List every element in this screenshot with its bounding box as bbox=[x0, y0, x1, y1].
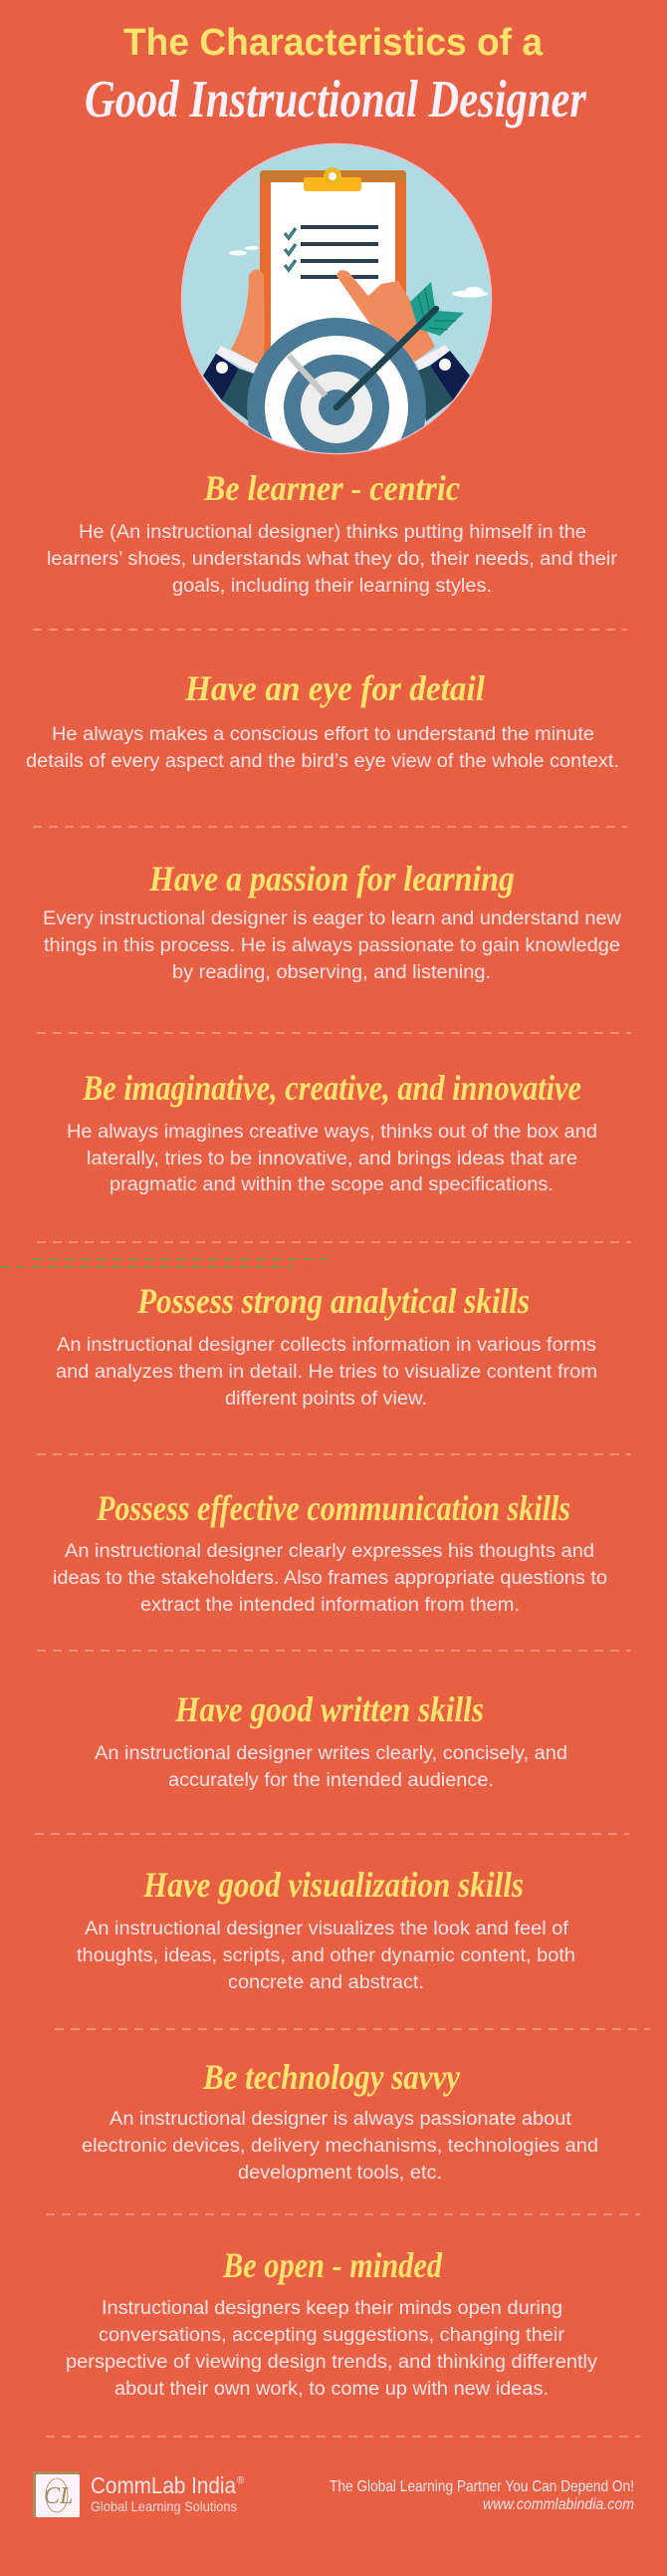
footer tagline and website bbox=[330, 2478, 634, 2513]
section: Possess effective communication skills bbox=[53, 1488, 607, 1616]
section: Possess effective communication skills: Possess effective communication skills bbox=[96, 1488, 570, 1528]
section: Be open-minded bbox=[66, 2245, 598, 2400]
icon: clouds bbox=[229, 246, 488, 297]
section: Have good written skills bbox=[95, 1689, 567, 1791]
section: Be learner-centric bbox=[47, 468, 618, 597]
footer logo: CommLab India: CL bbox=[44, 2483, 73, 2509]
section: Be open-minded: Be open - minded bbox=[222, 2245, 443, 2285]
section: Be imaginative, creative, and innovative bbox=[67, 1068, 597, 1195]
section: Be open-minded: about their own work, to come up with new ideas. bbox=[114, 2379, 549, 2400]
icon: right sleeve bbox=[415, 345, 470, 421]
title bbox=[85, 22, 587, 129]
section: Possess strong analytical skills: and analyzes them in detail. He tries to visualize content from bbox=[56, 1362, 597, 1383]
section: Be imaginative, creative, and innovative: pragmatic and within the scope and specifications. bbox=[110, 1174, 554, 1195]
icon: right hand bbox=[336, 270, 435, 362]
section: Possess strong analytical skills: Possess strong analytical skills bbox=[136, 1281, 530, 1321]
section: Have good written skills: Have good written skills bbox=[174, 1689, 484, 1729]
section: Be learner-centric: Be learner - centric bbox=[203, 468, 460, 508]
section: Be open-minded: conversations, accepting suggestions, changing their bbox=[99, 2325, 565, 2346]
section: Have an eye for detail: He always makes a conscious effort to understand the minute bbox=[52, 724, 594, 745]
footer tagline and website: www.commlabindia.com bbox=[483, 2496, 634, 2513]
section: Have good visualization skills: concrete and abstract. bbox=[228, 1972, 424, 1993]
icon: left hand bbox=[231, 269, 265, 367]
section: Be imaginative, creative, and innovative: laterally, tries to be innovative, and brings ideas that are bbox=[87, 1149, 577, 1169]
icon: left sleeve bbox=[203, 346, 259, 421]
section: Possess strong analytical skills: different points of view. bbox=[225, 1389, 427, 1410]
section: Possess strong analytical skills: An instructional designer collects information in various forms bbox=[57, 1335, 596, 1356]
footer logo: CommLab India: Global Learning Solutions bbox=[91, 2498, 237, 2514]
section: Have a passion for learning: Every instructional designer is eager to learn and understand new bbox=[43, 908, 621, 929]
section: Have good written skills: An instructional designer writes clearly, concisely, and bbox=[95, 1743, 567, 1764]
footer logo: CommLab India: CommLab India bbox=[91, 2472, 236, 2498]
section: Be imaginative, creative, and innovative: He always imagines creative ways, thinks out of the box and bbox=[67, 1122, 597, 1143]
section: Have a passion for learning bbox=[43, 859, 621, 983]
section: Possess effective communication skills: extract the intended information from them. bbox=[140, 1595, 520, 1616]
section: Have good visualization skills bbox=[77, 1865, 575, 1993]
icon: clipboard bbox=[260, 167, 406, 372]
section: Be learner-centric: learners’ shoes, understands what they do, their needs, and their bbox=[47, 549, 618, 570]
icon: arrow bbox=[336, 282, 464, 407]
footer logo: CommLab India bbox=[33, 2471, 245, 2517]
section: Be technology savvy: An instructional designer is always passionate about bbox=[110, 2109, 572, 2130]
section: Be technology savvy bbox=[82, 2057, 598, 2184]
section: Have good visualization skills: thoughts, ideas, scripts, and other dynamic content, both bbox=[77, 1945, 575, 1966]
section: Be technology savvy: development tools, etc. bbox=[238, 2163, 442, 2184]
section: Have a passion for learning: things in this process. He is always passionate to gain knowledge bbox=[44, 935, 620, 956]
section: Be learner-centric: He (An instructional designer) thinks putting himself in the bbox=[79, 522, 586, 543]
section: Have a passion for learning: Have a passion for learning bbox=[148, 859, 515, 899]
section: Have an eye for detail bbox=[26, 668, 619, 772]
section: Have good written skills: accurately for the intended audience. bbox=[168, 1770, 494, 1791]
section: Have good visualization skills: An instructional designer visualizes the look and feel of bbox=[85, 1919, 569, 1939]
icon: target bbox=[247, 318, 426, 453]
section: Have good visualization skills: Have good visualization skills bbox=[142, 1865, 524, 1905]
title: The Characteristics of a bbox=[123, 22, 544, 64]
section: Be open-minded: perspective of viewing design trends, and thinking differently bbox=[66, 2352, 598, 2373]
section: Be technology savvy: electronic devices, delivery mechanisms, technologies and bbox=[82, 2136, 598, 2157]
footer logo: CommLab India: ® bbox=[237, 2475, 245, 2486]
section: Be learner-centric: goals, including their learning styles. bbox=[172, 576, 492, 597]
section: Have an eye for detail: Have an eye for detail bbox=[184, 668, 485, 708]
illustration: clipboard, hands and target bbox=[181, 143, 492, 454]
section: Be technology savvy: Be technology savvy bbox=[202, 2057, 461, 2097]
section: Possess effective communication skills: ideas to the stakeholders. Also frames appropriate questions to bbox=[53, 1568, 607, 1589]
section: Have an eye for detail: details of every aspect and the bird’s eye view of the whole context. bbox=[26, 751, 619, 772]
section: Possess effective communication skills: An instructional designer clearly expresses his thoughts and bbox=[65, 1541, 594, 1562]
section: Be open-minded: Instructional designers keep their minds open during bbox=[102, 2298, 562, 2319]
section: Have a passion for learning: by reading, observing, and listening. bbox=[172, 962, 491, 983]
section: Possess strong analytical skills bbox=[56, 1281, 597, 1410]
section: Be imaginative, creative, and innovative: Be imaginative, creative, and innovative bbox=[82, 1068, 581, 1108]
